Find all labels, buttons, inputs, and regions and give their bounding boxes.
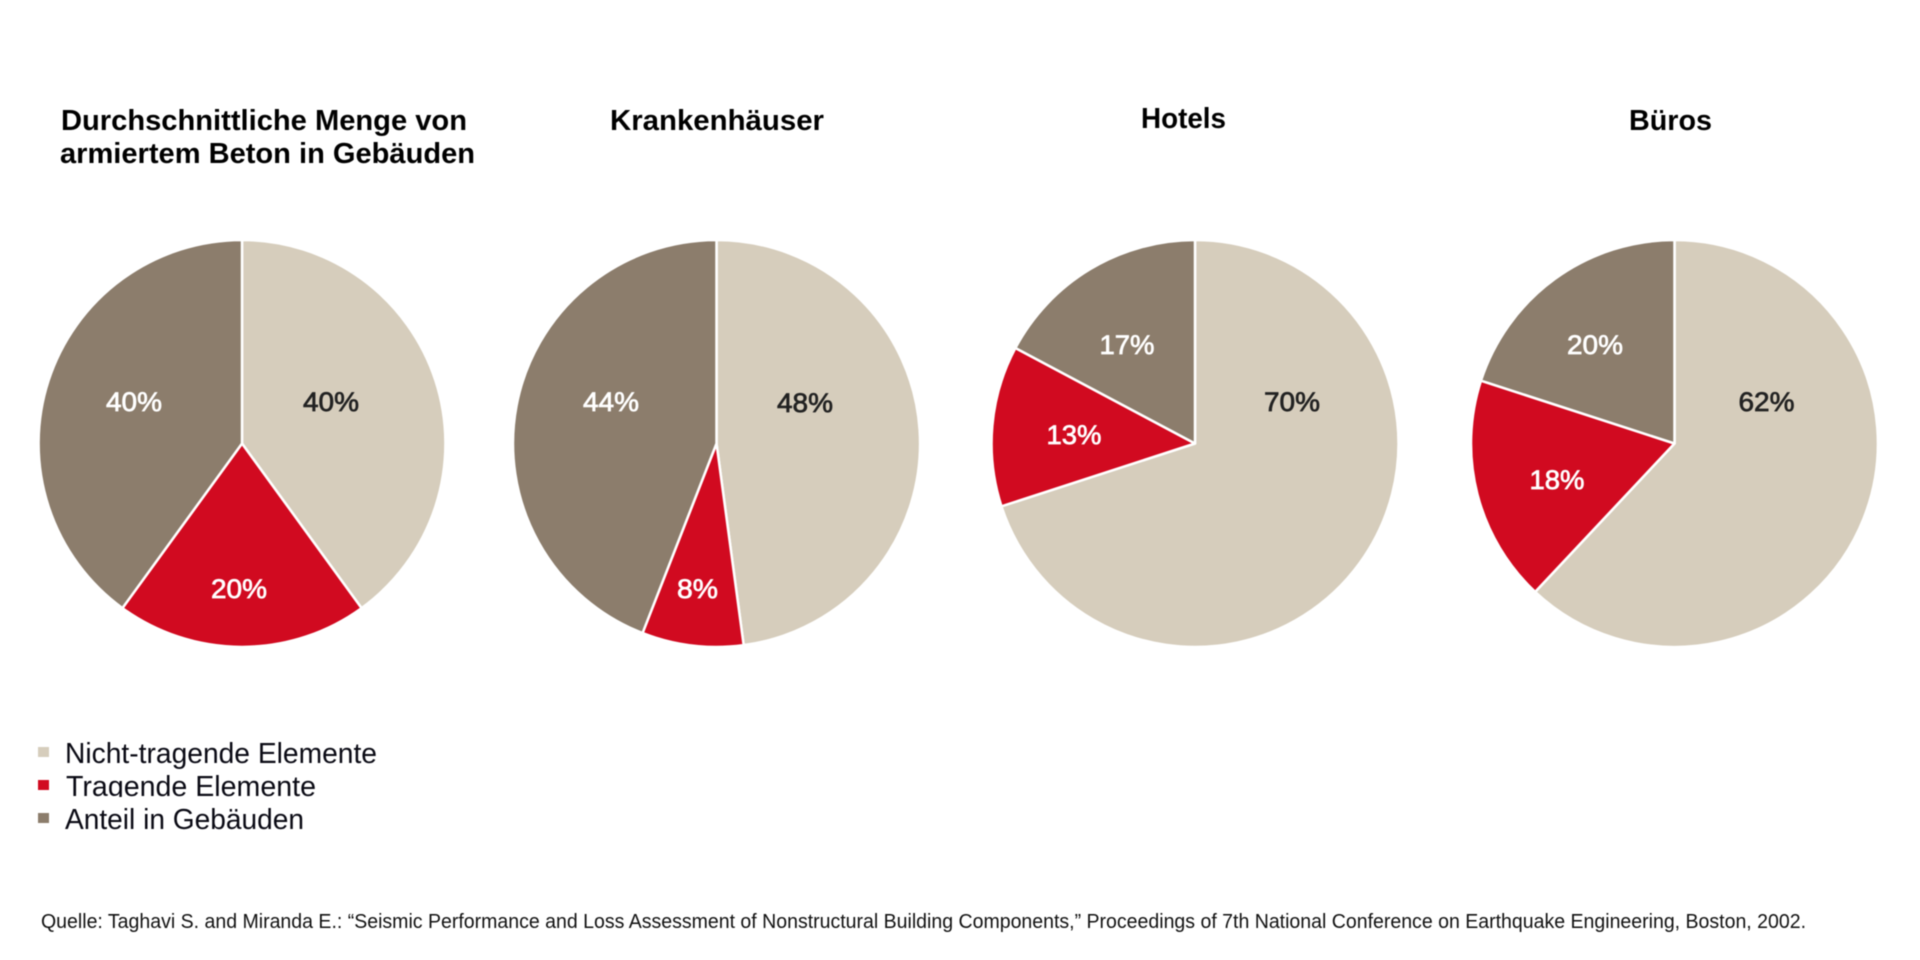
source note: Quelle: Taghavi S. and Miranda E.: “Seismic Performance and Loss Assessment of Nonstructural Building Components,” Proceedings of 7th National Conference on Earthquake Engineering, Boston, 2002. [41, 911, 1806, 933]
slice: structural 20% [122, 444, 362, 647]
pie labels: offices: 18% [1530, 465, 1584, 495]
slice: non-structural 70% [1001, 240, 1399, 647]
pie labels: average: 40% [106, 387, 162, 417]
pie labels: hotels [1046, 330, 1320, 450]
heading: average amount of reinforced concrete in buildings: armiertem Beton in Gebäuden [60, 138, 475, 170]
slice: share in buildings 20% [1481, 240, 1674, 444]
slice: share in buildings 17% [1015, 240, 1195, 444]
heading: hospitals: Krankenhäuser [610, 105, 824, 137]
pie labels: hospitals [583, 387, 833, 604]
pie labels: hospitals: 44% [583, 387, 639, 417]
pie chart: offices [1471, 240, 1878, 647]
slice: non-structural 48% [716, 240, 920, 645]
pie labels: hotels: 17% [1100, 330, 1154, 360]
slice: structural 8% [643, 444, 744, 647]
slice: non-structural 40% [242, 240, 445, 608]
legend [38, 738, 377, 836]
pie chart: hospitals [513, 240, 920, 647]
pie labels: average: 20% [211, 574, 267, 604]
pie labels: offices: 62% [1738, 387, 1794, 417]
pie chart: hotels [992, 240, 1399, 647]
slice: structural 13% [992, 348, 1195, 506]
slice: structural 18% [1471, 381, 1674, 592]
slice: share in buildings 40% [39, 240, 242, 608]
pie labels: average [106, 387, 359, 604]
slice: non-structural 62% [1535, 240, 1878, 647]
pie labels: average: 40% [303, 387, 359, 417]
legend item: share in buildings: Anteil in Gebäuden [65, 804, 304, 836]
pie labels: offices: 20% [1567, 330, 1623, 360]
heading: offices: Büros [1629, 105, 1712, 137]
pie labels: hospitals: 8% [677, 574, 718, 604]
legend item: structural elements [37, 774, 316, 798]
pie chart: average [39, 240, 445, 647]
slice: share in buildings 44% [513, 240, 716, 633]
legend item: structural elements: Tragende Elemente [66, 771, 316, 803]
pie labels: hotels: 13% [1046, 420, 1102, 450]
heading: average amount of reinforced concrete in buildings: Durchschnittliche Menge von [61, 105, 467, 137]
pie labels: hospitals: 48% [777, 388, 833, 418]
legend item: non-structural elements: Nicht-tragende Elemente [65, 738, 377, 770]
heading: average amount of reinforced concrete in buildings [60, 105, 475, 170]
pie labels: offices [1530, 330, 1794, 495]
heading: hotels: Hotels [1141, 103, 1226, 135]
pie labels: hotels: 70% [1264, 387, 1320, 417]
